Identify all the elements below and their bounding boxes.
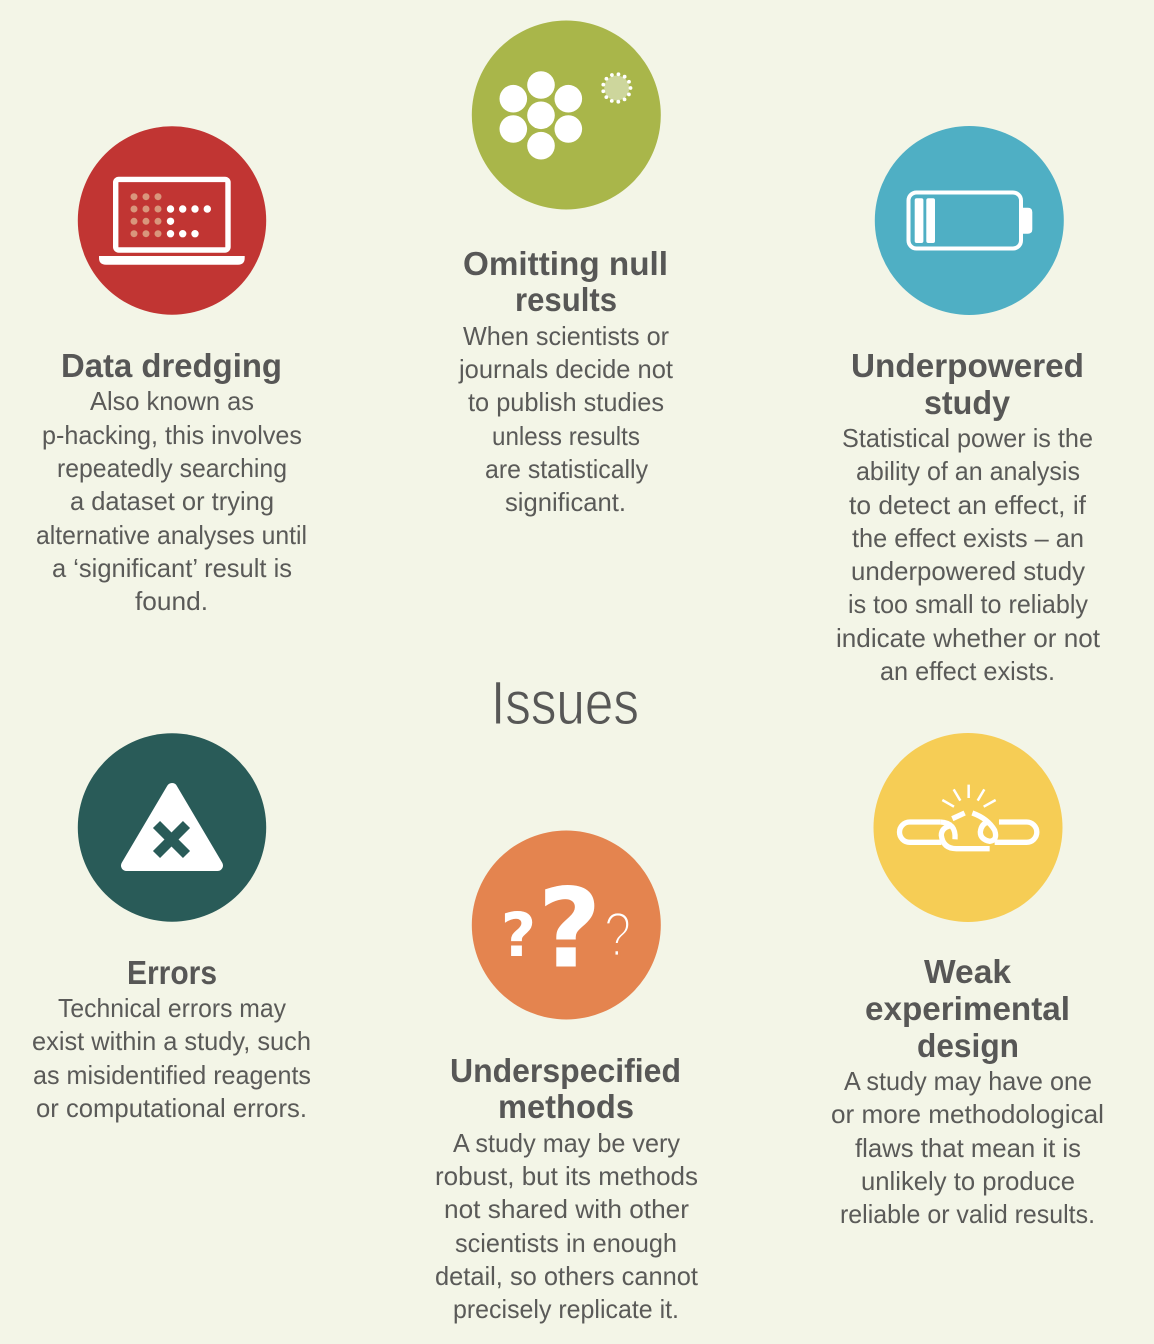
text block: omitting null results description: to publish studies (468, 387, 664, 417)
text block: underpowered study description (836, 423, 1101, 686)
icon: low battery (875, 126, 1064, 315)
icon: warning triangle with cross (78, 733, 266, 922)
text block: data dredging description (36, 386, 307, 616)
text block: errors description: or computational errors. (36, 1093, 307, 1123)
text block: errors description: Technical errors may (58, 993, 286, 1023)
text block: omitting null results description: journals decide not (458, 354, 674, 384)
text block: underspecified methods description: scientists in enough (455, 1228, 677, 1258)
text block: errors description: exist within a study, such (32, 1026, 311, 1056)
text block: omitting null results description (458, 321, 674, 517)
text block: errors description (32, 993, 311, 1123)
icon: question marks: ? (538, 864, 601, 992)
text block: data dredging description: a dataset or trying (70, 486, 274, 516)
text block: underpowered study description: Statistical power is the (842, 423, 1093, 453)
icon: question marks: ? (604, 899, 631, 969)
panel: weak experimental design (831, 733, 1104, 1229)
icon: question marks: ? (501, 900, 536, 971)
text block: underspecified methods description: robust, but its methods (435, 1161, 698, 1191)
heading: underspecified methods: Underspecified (450, 1052, 681, 1089)
panel: underspecified methods (435, 830, 699, 1324)
heading: weak experimental design: design (917, 1027, 1019, 1064)
panel: omitting null results (458, 20, 674, 517)
heading: omitting null results: Omitting null (463, 245, 668, 282)
icon: laptop with dots (78, 126, 266, 315)
heading: weak experimental design (865, 953, 1070, 1064)
text block: underspecified methods description: A study may be very (453, 1128, 680, 1158)
text block: data dredging description: repeatedly searching (57, 453, 287, 483)
icon: question marks (472, 830, 661, 1020)
text block: data dredging description: Also known as (90, 386, 254, 416)
heading: errors: Errors (127, 954, 217, 991)
heading: weak experimental design: Weak (924, 953, 1012, 990)
icon: broken chain link (874, 733, 1062, 922)
icon: cluster of circles (472, 20, 661, 210)
text block: weak experimental design description (831, 1066, 1104, 1229)
text block: underspecified methods description: precisely replicate it. (453, 1294, 679, 1324)
text block: errors description: as misidentified reagents (33, 1060, 311, 1090)
text block: underspecified methods description: detail, so others cannot (435, 1261, 699, 1291)
text block: omitting null results description: When scientists or (463, 321, 669, 351)
text block: data dredging description: a ‘significant’ result is (52, 553, 292, 583)
heading: underspecified methods (450, 1052, 681, 1125)
heading: data dredging: Data dredging (61, 347, 282, 384)
title: issues: Issues (491, 669, 639, 737)
panel: errors (32, 733, 311, 1123)
text block: weak experimental design description: unlikely to produce (861, 1166, 1075, 1196)
text block: data dredging description: found. (135, 586, 208, 616)
text block: underpowered study description: to detect an effect, if (849, 490, 1087, 520)
text block: underpowered study description: is too small to reliably (848, 589, 1088, 619)
text block: weak experimental design description: A study may have one (844, 1066, 1092, 1096)
text block: weak experimental design description: or more methodological (831, 1099, 1104, 1129)
text block: omitting null results description: are statistically (485, 454, 648, 484)
heading: underpowered study (851, 347, 1084, 421)
text block: data dredging description: alternative analyses until (36, 520, 307, 550)
text block: underpowered study description: the effect exists – an (852, 523, 1084, 553)
panel: data dredging (36, 126, 307, 616)
heading: underspecified methods: methods (498, 1088, 634, 1125)
text block: underpowered study description: ability of an analysis (856, 456, 1080, 486)
text block: underpowered study description: indicate whether or not (836, 623, 1101, 653)
text block: data dredging description: p-hacking, this involves (42, 420, 302, 450)
heading: underpowered study: Underpowered (851, 347, 1084, 384)
heading: omitting null results: results (515, 281, 617, 318)
heading: omitting null results (463, 245, 668, 318)
text block: weak experimental design description: reliable or valid results. (840, 1199, 1095, 1229)
text block: omitting null results description: significant. (505, 487, 626, 517)
text block: underpowered study description: underpowered study (851, 556, 1085, 586)
text block: omitting null results description: unless results (492, 421, 640, 451)
text block: underspecified methods description: not shared with other (444, 1194, 689, 1224)
heading: underpowered study: study (924, 384, 1011, 421)
panel: underpowered study (836, 126, 1101, 686)
text block: weak experimental design description: flaws that mean it is (855, 1133, 1081, 1163)
heading: weak experimental design: experimental (865, 990, 1070, 1027)
text block: underpowered study description: an effect exists. (880, 656, 1055, 686)
text block: underspecified methods description (435, 1128, 699, 1324)
